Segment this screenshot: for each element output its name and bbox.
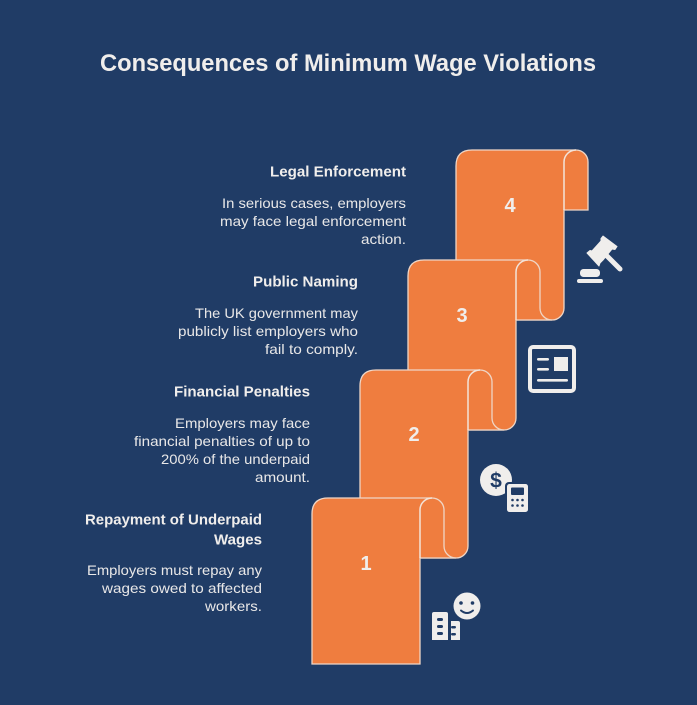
text block: Financial Penalties — [134, 384, 310, 485]
scroll step 1 — [312, 498, 456, 664]
text block: Repayment of Underpaid Wages: Repayment of Underpaid — [85, 512, 262, 528]
icon: dollar and calculator — [480, 464, 530, 514]
scroll step 2: 2 — [408, 424, 420, 446]
text block: Legal Enforcement: action. — [361, 231, 406, 247]
text block: Repayment of Underpaid Wages: Wages — [214, 532, 262, 548]
text block: Public Naming: The UK government may — [195, 305, 358, 321]
scroll step 4 — [456, 150, 588, 320]
icon: news page — [530, 347, 574, 391]
icon: smiley and buildings — [432, 592, 480, 640]
scroll step 4: 4 — [504, 195, 516, 217]
scroll step 3 — [408, 260, 552, 430]
text block: Repayment of Underpaid Wages: workers. — [204, 598, 262, 614]
text block: Public Naming: publicly list employers who — [178, 323, 358, 339]
scroll step 3: 3 — [456, 305, 468, 327]
text block: Financial Penalties: Financial Penalties — [174, 384, 310, 400]
text block: Public Naming: Public Naming — [253, 274, 358, 290]
text block: Public Naming: fail to comply. — [265, 341, 358, 357]
text block: Public Naming — [178, 274, 358, 357]
text block: Financial Penalties: Employers may face — [175, 415, 310, 431]
text block: Financial Penalties: amount. — [255, 469, 310, 485]
text block: Legal Enforcement: In serious cases, employers — [222, 195, 406, 211]
scroll step 1: 1 — [360, 553, 372, 575]
icon: gavel — [577, 236, 620, 283]
text block: Repayment of Underpaid Wages: Employers must repay any — [87, 562, 262, 578]
text block: Legal Enforcement — [220, 164, 406, 247]
icon: dollar and calculator: $ — [490, 470, 502, 492]
scroll step 2 — [360, 370, 504, 558]
text block: Repayment of Underpaid Wages: wages owed to affected — [101, 580, 262, 596]
text block: Financial Penalties: 200% of the underpaid — [161, 451, 310, 467]
title: Consequences of Minimum Wage Violations — [100, 50, 596, 77]
text block: Repayment of Underpaid Wages — [85, 512, 262, 614]
text block: Legal Enforcement: may face legal enforcement — [220, 213, 406, 229]
text block: Legal Enforcement: Legal Enforcement — [270, 164, 406, 180]
text block: Financial Penalties: financial penalties of up to — [134, 433, 310, 449]
